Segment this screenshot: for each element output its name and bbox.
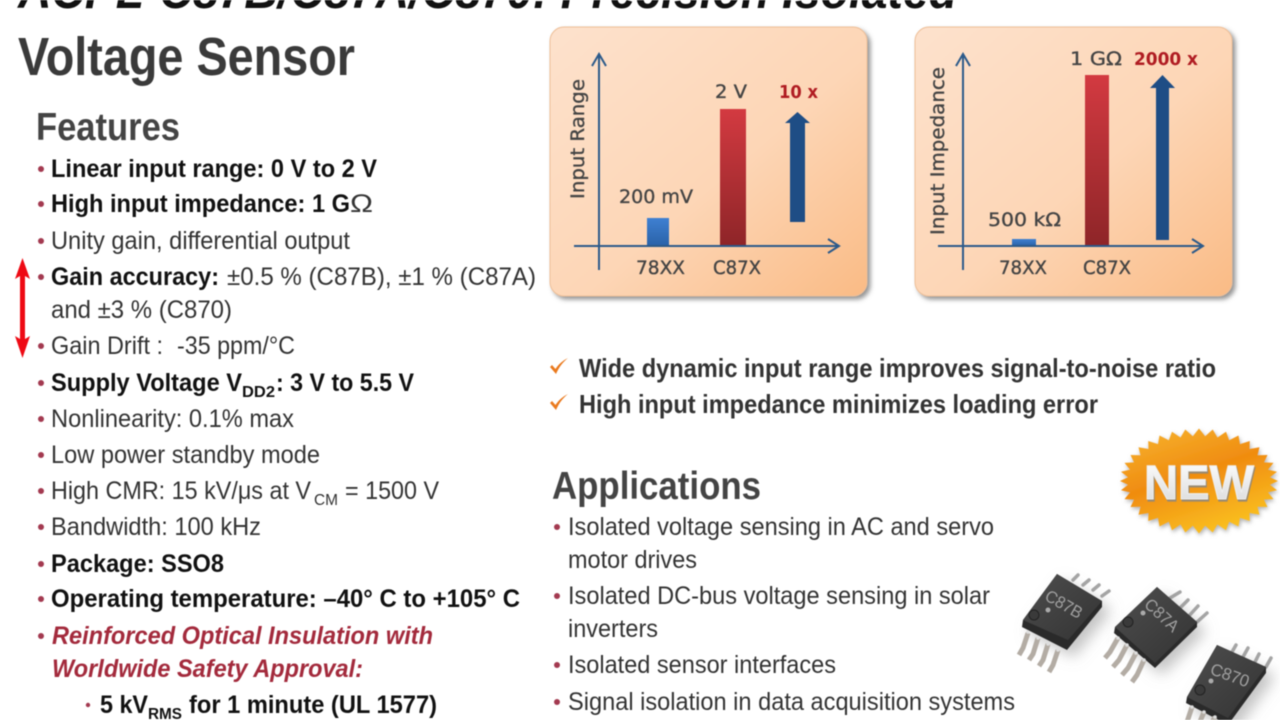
panel: input impedance chart [915,27,1232,296]
bar: C87X [720,109,746,246]
arrow: 2000x gain [1150,75,1175,240]
value: 10 x: 10 x [779,82,818,103]
benefit: signal-to-noise: Wide dynamic input range improves signal-to-noise ratio [579,353,1216,383]
heading: applications: Applications [552,465,761,508]
value: 1 GΩ: 1 GΩ [1070,48,1122,70]
feature: gain drift: Gain Drift : [51,332,163,360]
application: AC and servo drives: motor drives [568,546,697,574]
icon: check mark [550,394,568,410]
arrow: red double-headed [15,258,30,358]
feature: operating temperature: Operating temperature: –40° C to +105° C [51,585,520,613]
application: AC and servo drives [554,513,994,574]
feature: reinforced insulation: Worldwide Safety Approval: [52,655,363,683]
feature: gain accuracy: Gain accuracy: [51,263,219,291]
feature: nonlinearity: Nonlinearity: 0.1% max [51,405,294,433]
feature: high CMR: High CMR: 15 kV/μs at V [51,477,311,505]
chip: C87A: C87A [1141,595,1183,636]
badge: NEW: NEW [1144,457,1255,510]
feature: supply voltage: Supply Voltage V [51,369,242,397]
chart axes [574,54,839,270]
feature: high input impedance: High input impedance: 1 G [51,190,350,218]
category: C87X: C87X [713,257,761,279]
applications list [554,513,1015,716]
feature: gain accuracy: and ±3 % (C870) [51,296,232,324]
application: data acquisition: Signal isolation in data acquisition systems [568,688,1015,716]
chip: C87B [1019,574,1109,672]
heading: features: Features [36,106,180,149]
chip: C870: C870 [1208,660,1252,691]
icon: check mark [550,358,568,374]
feature: 5 kV rating: for 1 minute (UL 1577) [189,691,437,719]
feature: package: Package: SSO8 [51,550,224,578]
benefits checklist [550,353,1216,419]
application: AC and servo drives: Isolated voltage sensing in AC and servo [568,513,994,541]
feature: gain drift: -35 ppm/°C [177,332,295,360]
feature: low power standby: Low power standby mode [51,441,320,469]
feature: reinforced insulation: Reinforced Optical Insulation with [52,622,433,650]
features list [38,155,536,720]
feature: gain accuracy [38,263,536,324]
application: solar inverters: Isolated DC-bus voltage sensing in solar [568,582,990,610]
feature: gain accuracy: ±0.5 % (C87B), ±1 % (C87A) [227,263,536,291]
application: solar inverters [554,582,990,643]
feature: 5 kV rating: 5 kV [100,691,148,719]
category: 78XX: 78XX [999,257,1047,279]
feature: high CMR [38,477,439,509]
arrow: 10x gain [785,112,810,222]
axis label: Input Range [567,79,589,199]
chip: C87B: C87B [1042,586,1086,623]
bar: C87X [1085,75,1109,246]
application: sensor interfaces: Isolated sensor interfaces [568,651,836,679]
benefit: loading error: High input impedance minimizes loading error [579,389,1098,419]
chart axes [938,54,1203,270]
feature: reinforced insulation [38,622,433,683]
badge: NEW [1120,428,1278,534]
category: 78XX: 78XX [636,257,685,279]
feature: high CMR: = 1500 V [345,477,439,505]
bar: 78XX [647,218,669,246]
value: 200 mV: 200 mV [619,186,693,208]
panel: input range chart [550,27,867,296]
feature: unity gain: Unity gain, differential output [51,227,350,255]
feature: 5 kV rating [86,691,437,720]
feature: high CMR: CM [314,492,338,509]
feature: bandwidth: Bandwidth: 100 kHz [51,513,261,541]
value: 500 kΩ: 500 kΩ [988,209,1061,231]
feature: linear input range: Linear input range: 0 V to 2 V [51,155,377,183]
category: C87X: C87X [1083,257,1131,279]
title: Voltage Sensor [18,27,355,87]
chip: C870 [1186,645,1271,720]
feature: supply voltage [38,369,414,401]
value: 2000 x: 2000 x [1134,49,1198,70]
application: solar inverters: inverters [568,615,658,643]
chip: C87A [1105,587,1207,682]
feature: high input impedance: Ω [350,190,373,218]
title [16,0,958,87]
feature: gain drift [38,332,295,360]
bar: 78XX [1012,239,1036,246]
feature: supply voltage: DD2 [242,384,275,401]
value: 2 V: 2 V [715,81,747,103]
axis label: Input Impedance [927,67,949,235]
badge: NEW: NEW [1145,459,1256,512]
feature: supply voltage: : 3 V to 5.5 V [276,369,414,397]
